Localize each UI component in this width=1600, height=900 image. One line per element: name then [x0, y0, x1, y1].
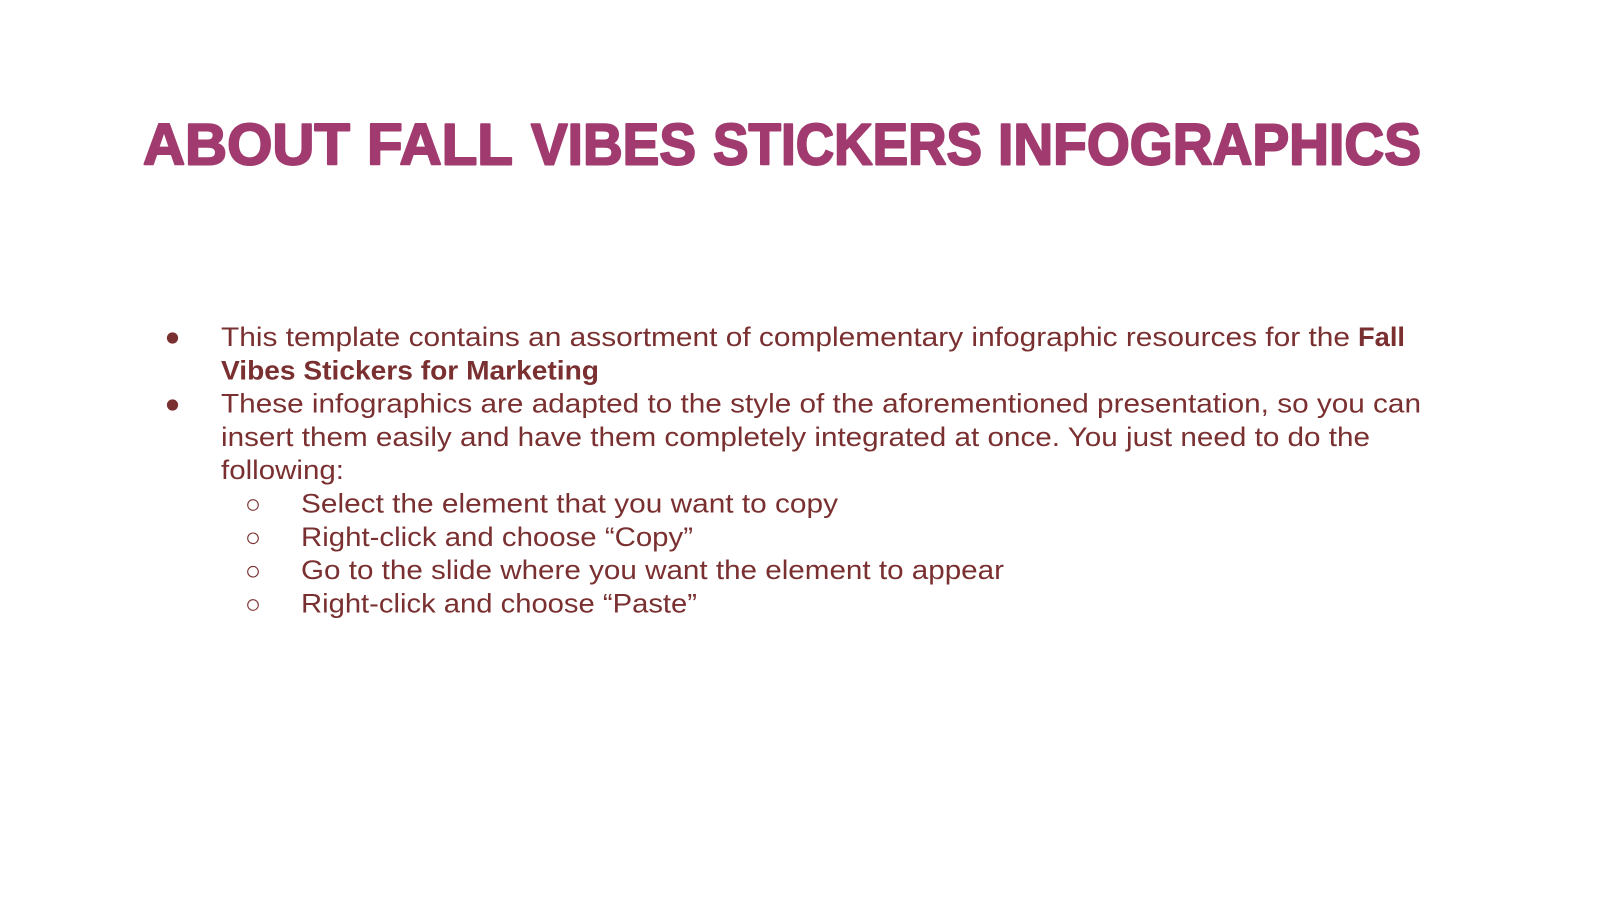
- sub-item: paste: Right-click and choose “Paste”: [301, 588, 697, 618]
- bullet item 1: [167, 322, 1405, 385]
- title: [143, 112, 1421, 178]
- bullet item 2: insert them easily and have them completely integrated at once. You just need to do the: [221, 422, 1370, 452]
- bullet item 1: Fall: [1358, 322, 1405, 352]
- title: INFOGRAPHICS: [998, 112, 1421, 178]
- bullet item 1: Vibes Stickers for Marketing: [221, 355, 599, 385]
- bullet list: [167, 322, 1421, 618]
- bullet item 2: [167, 389, 1421, 485]
- title: STICKERS: [713, 112, 982, 178]
- title: ABOUT: [143, 112, 350, 178]
- bullet item 2: following:: [221, 455, 344, 485]
- title: FALL: [367, 112, 513, 178]
- bullet item 2: These infographics are adapted to the style of the aforementioned presentation, so you can: [221, 389, 1421, 419]
- title: VIBES: [531, 112, 696, 178]
- sub-item: go to slide: Go to the slide where you want the element to appear: [301, 555, 1004, 585]
- sub-item: select: Select the element that you want to copy: [301, 488, 839, 518]
- sub-item: copy: Right-click and choose “Copy”: [301, 522, 693, 552]
- bullet item 1: This template contains an assortment of complementary infographic resources for the: [221, 322, 1350, 352]
